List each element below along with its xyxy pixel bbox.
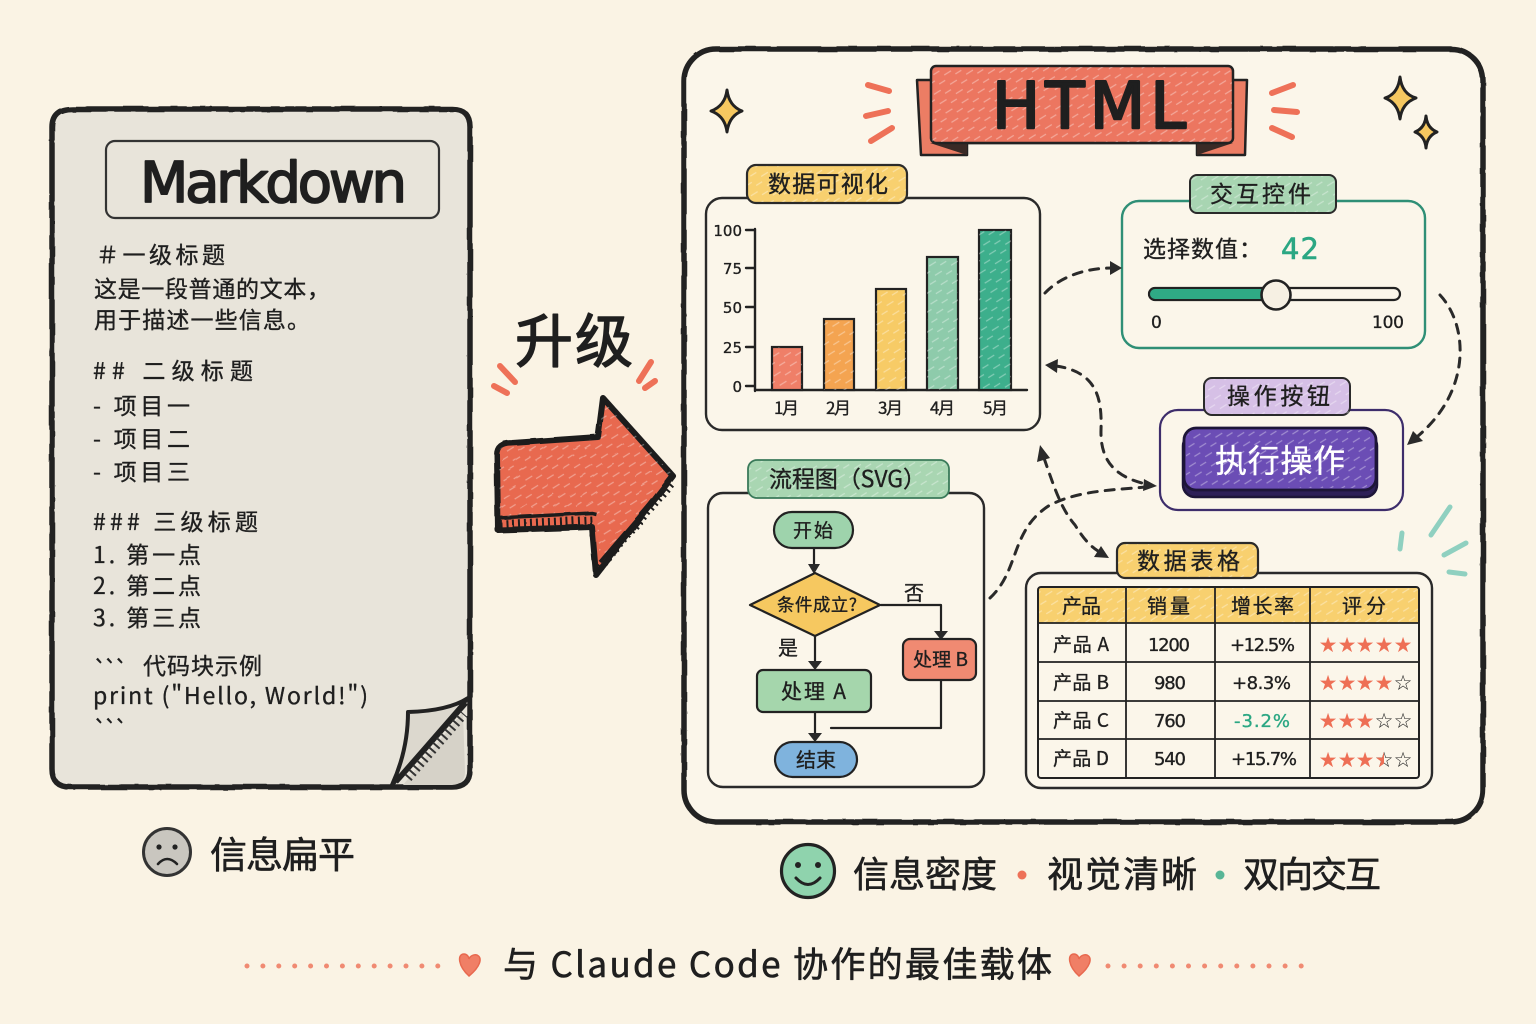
text block: markdown source: - 项目三 [93, 453, 190, 487]
bar chart: 4月 [930, 394, 955, 419]
panel: data visualisation [706, 165, 1040, 430]
node: decision [750, 573, 880, 636]
decoration: teal rays [1400, 507, 1466, 574]
text block: markdown source: 用于描述一些信息。 [94, 301, 310, 335]
text block: markdown source: 2. 第二点 [93, 567, 201, 601]
table: 产品 B [1053, 668, 1109, 695]
decoration: banner rays [866, 85, 1297, 141]
caption: benefits: 信息密度 [853, 846, 997, 898]
icon: smiley [782, 844, 834, 898]
bar chart: 0 [732, 378, 742, 396]
bar chart: 25 [723, 339, 742, 357]
rating stars: ★★★★ [1319, 671, 1393, 695]
rating stars: ★★★★★ [1319, 633, 1412, 657]
panel: interactive controls [1122, 175, 1425, 348]
icon: sparkles [711, 77, 1437, 148]
text block: markdown source: ### 三级标题 [93, 503, 258, 537]
text block: markdown source: 3. 第三点 [93, 599, 201, 633]
icon: folded page corner [392, 698, 468, 785]
label: interactive controls: 交互控件 [1210, 175, 1311, 209]
node: start: 开始 [793, 516, 833, 543]
node: process B: 处理 B [913, 645, 968, 672]
arrow: chart to controls [1045, 261, 1122, 293]
caption: flat information: 信息扁平 [210, 825, 355, 879]
table: +8.3% [1232, 673, 1291, 694]
heading: upgrade [494, 295, 655, 393]
slider: 100 [1372, 313, 1404, 333]
rating stars [1319, 633, 1412, 772]
arrow: upgrade arrow [497, 398, 673, 575]
arrow: controls to button [1407, 295, 1460, 445]
node: decision: 条件成立? [777, 592, 857, 617]
bar chart: 50 [723, 299, 742, 317]
heading: upgrade: 升级 [515, 295, 633, 379]
caption: benefits: 视觉清晰 [1047, 846, 1197, 898]
table: 540 [1154, 749, 1186, 770]
table: 980 [1154, 673, 1186, 694]
text block: markdown source: ## 二级标题 [93, 352, 253, 386]
node: process B [903, 639, 976, 680]
rating stars: ☆☆ [1375, 709, 1412, 733]
label: action button: 操作按钮 [1227, 377, 1330, 411]
arrow: flowchart to button [990, 487, 1146, 598]
label: data visualisation [747, 165, 907, 203]
label: interactive controls [1190, 175, 1336, 213]
arrow: chart to button two-way [1045, 359, 1157, 491]
bar chart: 75 [723, 260, 742, 278]
bar chart: 5月 [983, 394, 1008, 419]
table: +12.5% [1230, 635, 1295, 656]
label: data table [1117, 542, 1258, 578]
caption: flat information [144, 825, 355, 879]
title: HTML banner [917, 66, 1247, 155]
label: action button [1204, 377, 1350, 415]
node: start [774, 512, 853, 548]
rating stars: ☆☆ [1375, 748, 1412, 772]
label: yes: 是 [778, 632, 798, 661]
label: no: 否 [904, 577, 924, 606]
table: 评分 [1342, 590, 1386, 619]
panel: data table [1026, 542, 1432, 788]
bar chart [713, 222, 1027, 419]
table: 产品 [1062, 590, 1101, 619]
node: end: 结束 [796, 744, 836, 773]
heading: Markdown: Markdown [140, 151, 407, 216]
rating stars: ☆ [1394, 671, 1412, 695]
label: data table: 数据表格 [1137, 542, 1240, 576]
node: end [775, 742, 857, 777]
rating stars: ★★★ [1319, 748, 1374, 772]
flowchart diagram [750, 512, 976, 777]
table: 销量 [1147, 590, 1190, 619]
slider: 0 [1151, 313, 1162, 333]
text block: markdown source [93, 236, 368, 745]
text block: markdown source: ``` [93, 711, 128, 745]
bar chart: 2月 [826, 394, 851, 419]
table: +15.7% [1231, 749, 1297, 770]
caption: benefits: 双向交互 [1243, 846, 1381, 898]
footer tagline [247, 937, 1302, 988]
footer tagline: 与 Claude Code 协作的最佳载体 [503, 937, 1052, 988]
button: execute action [1183, 428, 1377, 497]
text block: markdown source: - 项目二 [93, 420, 190, 454]
bar chart: 3月 [878, 394, 903, 419]
slider [1149, 280, 1404, 333]
bar chart: 100 [713, 222, 742, 240]
table: 760 [1154, 711, 1186, 732]
panel: interactive controls: 选择数值： [1143, 230, 1262, 264]
text block: markdown source: - 项目一 [93, 387, 190, 421]
icon: right heart [1070, 954, 1090, 976]
text block: markdown source: print ("Hello, World!") [93, 677, 368, 711]
table: 1200 [1148, 635, 1190, 656]
panel: flowchart [708, 460, 984, 787]
text block: markdown source: 代码块示例 [143, 647, 262, 681]
panel: action button [1160, 377, 1403, 510]
text block: markdown source: 这是一段普通的文本， [94, 270, 330, 304]
label: flowchart [748, 460, 949, 498]
title: HTML banner: HTML [992, 70, 1186, 144]
table: 产品 C [1053, 706, 1109, 733]
panel: markdown document [52, 109, 470, 787]
node: process A [757, 670, 871, 712]
label: flowchart: 流程图（SVG） [769, 460, 926, 494]
table: 增长率 [1231, 590, 1294, 619]
caption: benefits [782, 844, 1381, 898]
button: execute action: 执行操作 [1215, 436, 1345, 482]
icon: left heart [460, 954, 480, 976]
node: process A: 处理 A [781, 676, 846, 706]
rating stars: ★ [1375, 748, 1393, 772]
panel: HTML page [684, 49, 1483, 822]
text block: markdown source: ＃一级标题 [96, 236, 225, 270]
rating stars: ★★★ [1319, 709, 1374, 733]
text block: markdown source: ``` [93, 651, 128, 685]
text block: markdown source: 1. 第一点 [93, 536, 201, 570]
table: 产品 D [1053, 744, 1109, 771]
panel: interactive controls: 42 [1281, 232, 1319, 266]
heading: Markdown [106, 141, 439, 218]
table: -3.2% [1234, 711, 1290, 732]
bar chart: 1月 [774, 394, 799, 419]
label: data visualisation: 数据可视化 [768, 165, 888, 199]
table [1038, 587, 1419, 778]
arrow: chart to table two-way [1037, 445, 1109, 558]
icon: sad face [144, 828, 190, 876]
table: 产品 A [1053, 630, 1109, 657]
